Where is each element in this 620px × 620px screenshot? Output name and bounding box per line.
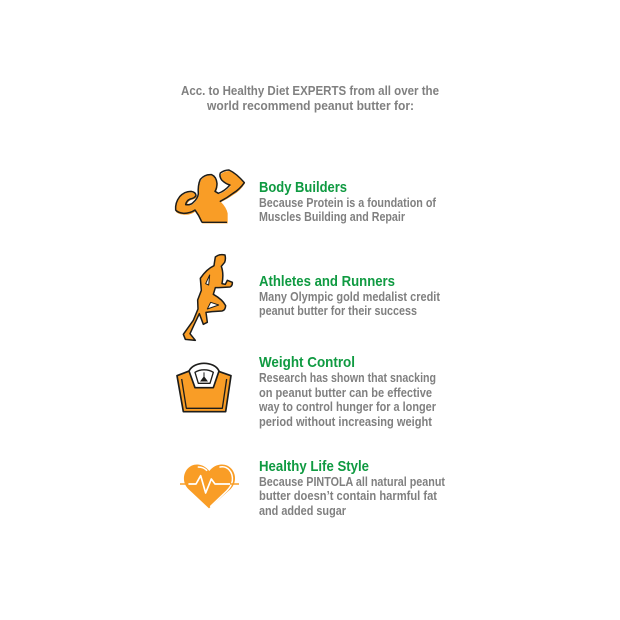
panel: athletes and runners (183, 255, 441, 340)
heading: Athletes and Runners (259, 273, 395, 290)
heading: Weight Control (259, 354, 355, 371)
icon: weighing scale (177, 363, 231, 412)
panel: weight control (177, 354, 436, 429)
description: peanut butter for their success (259, 304, 417, 318)
description: Muscles Building and Repair (259, 210, 405, 224)
title: world recommend peanut butter for: (206, 99, 414, 113)
description (259, 196, 437, 224)
description (259, 290, 441, 318)
heading: Healthy Life Style (259, 458, 369, 475)
icon: heart with pulse (180, 464, 239, 508)
heading: Body Builders (259, 179, 347, 196)
description: on peanut butter can be effective (259, 386, 432, 400)
description: Research has shown that snacking (259, 371, 436, 385)
title: Acc. to Healthy Diet EXPERTS from all over the (181, 84, 439, 98)
description: and added sugar (259, 504, 346, 518)
description: Because Protein is a foundation of (259, 196, 437, 210)
description: period without increasing weight (259, 415, 433, 429)
description (258, 371, 436, 429)
panel: healthy life style (180, 458, 446, 518)
description: butter doesn’t contain harmful fat (259, 489, 438, 503)
description: way to control hunger for a longer (258, 400, 436, 414)
icon: flexing body builder (176, 170, 245, 223)
panel: body builders (176, 170, 437, 224)
description: Many Olympic gold medalist credit (259, 290, 441, 304)
title (181, 84, 439, 113)
description (259, 475, 446, 518)
icon: runner (183, 255, 232, 340)
description: Because PINTOLA all natural peanut (259, 475, 446, 489)
